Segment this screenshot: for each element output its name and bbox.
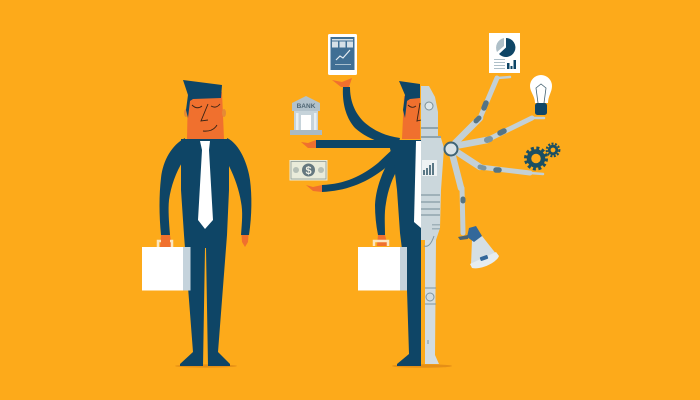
figure: left businessman xyxy=(142,80,251,368)
left man hands xyxy=(160,235,248,247)
left man tie xyxy=(198,141,213,229)
icon: tablet xyxy=(328,34,357,75)
icon: bank: BANK xyxy=(297,103,316,110)
human facial features xyxy=(408,103,421,121)
icon: megaphone xyxy=(458,226,499,268)
human hair xyxy=(399,81,420,118)
left man suit and legs xyxy=(180,139,230,366)
icon: dollar bill xyxy=(290,160,328,180)
robot arm to gears xyxy=(457,152,543,174)
icon: dollar bill: $ xyxy=(305,165,312,177)
robot chest chart xyxy=(422,160,437,176)
human hands xyxy=(301,78,388,246)
robot torso xyxy=(421,138,444,240)
upper human arm xyxy=(343,87,400,146)
robot arm to megaphone xyxy=(452,153,463,233)
robot shoulder joint xyxy=(444,142,458,156)
robot arm to document xyxy=(455,77,510,143)
left man arms xyxy=(160,138,251,235)
lower human arm xyxy=(322,146,402,192)
robot knee and leg joints xyxy=(424,236,436,344)
robot neck bands xyxy=(421,127,441,138)
figure: right half-human half-robot businessman xyxy=(301,77,544,368)
robot eye xyxy=(425,102,433,110)
human body and leg xyxy=(388,140,421,366)
middle human arm xyxy=(316,140,400,148)
human face xyxy=(402,92,420,139)
left man hand on handle xyxy=(161,237,170,246)
human side arm xyxy=(375,150,400,235)
left man facial features xyxy=(192,104,220,131)
left man face xyxy=(187,90,224,139)
right man briefcase xyxy=(358,241,407,290)
icon: gears xyxy=(526,144,559,169)
icon: bank xyxy=(290,96,322,135)
icon: lightbulb xyxy=(530,75,552,115)
robot head xyxy=(421,86,438,137)
robot leg xyxy=(425,240,439,364)
icon: report document xyxy=(489,33,520,73)
left man ears xyxy=(184,109,226,117)
left man hair xyxy=(183,80,222,118)
human tie half xyxy=(414,141,421,228)
left man briefcase xyxy=(142,241,190,290)
robot arm to lightbulb xyxy=(455,118,544,146)
robot abdomen bands xyxy=(421,194,440,230)
